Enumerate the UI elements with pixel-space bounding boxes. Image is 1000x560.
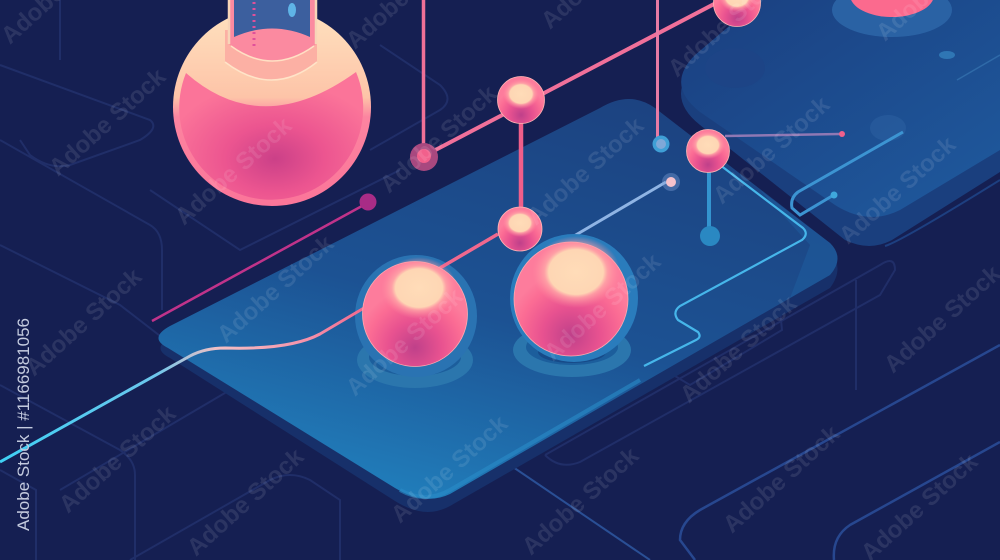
magenta line and dot bbox=[152, 194, 376, 321]
background blue line tracks bbox=[680, 345, 1000, 560]
watermarks: Adobe Stock bbox=[386, 410, 514, 528]
panel: main platform bbox=[158, 99, 838, 512]
watermarks: Adobe Stock bbox=[170, 112, 298, 230]
watermarks: Adobe Stock bbox=[675, 290, 803, 408]
node: small blue bbox=[652, 136, 670, 152]
socket rings under spheres bbox=[357, 332, 473, 388]
watermarks: Adobe Stock bbox=[341, 283, 469, 401]
watermarks: Adobe Stock bbox=[708, 91, 836, 209]
wire: pink link between spheres bbox=[440, 234, 498, 268]
watermarks: Adobe Stock bbox=[212, 230, 340, 348]
watermarks: Adobe Stock bbox=[54, 400, 182, 518]
wire: vertical link bbox=[519, 120, 523, 210]
watermarks: Adobe Stock bbox=[718, 420, 846, 538]
sphere: top right partial bbox=[714, 0, 760, 26]
right node with line bbox=[686, 130, 845, 246]
panel: upper right platform bbox=[681, 0, 1000, 246]
sphere: large right bbox=[514, 236, 628, 356]
watermarks: Adobe Stock bbox=[539, 248, 667, 366]
sphere: top connector bbox=[498, 76, 544, 124]
watermarks: Adobe Stock bbox=[20, 263, 148, 381]
wire: long line from left edge to sphere bbox=[0, 308, 364, 462]
watermarks: Adobe Stock bbox=[375, 80, 503, 198]
watermarks: Adobe Stock bbox=[44, 63, 172, 181]
watermarks: Adobe Stock bbox=[517, 442, 645, 560]
blue circuit line on upper platform bbox=[792, 132, 903, 215]
flask: round bottom with liquid bbox=[173, 0, 371, 206]
wire: vertical line to node bbox=[422, 0, 425, 156]
watermarks: Adobe Stock bbox=[182, 443, 310, 560]
node: pink end of diagonal bbox=[410, 143, 438, 171]
stock id text: Adobe Stock | #1166981056 bbox=[14, 318, 33, 531]
lower edge glow bbox=[400, 380, 640, 497]
watermarks: Adobe Stock bbox=[834, 131, 962, 249]
watermarks: Adobe Stock bbox=[522, 112, 650, 230]
blue circuit line on main platform bbox=[644, 165, 806, 366]
socket and pink ball top right bbox=[832, 0, 952, 37]
sphere: middle small bbox=[498, 207, 542, 251]
wire: diagonal upper pink line bbox=[424, 0, 737, 156]
wire: vertical line at right bbox=[656, 0, 659, 140]
sphere: large left bbox=[362, 257, 468, 366]
white-blue line segment bbox=[574, 182, 666, 236]
